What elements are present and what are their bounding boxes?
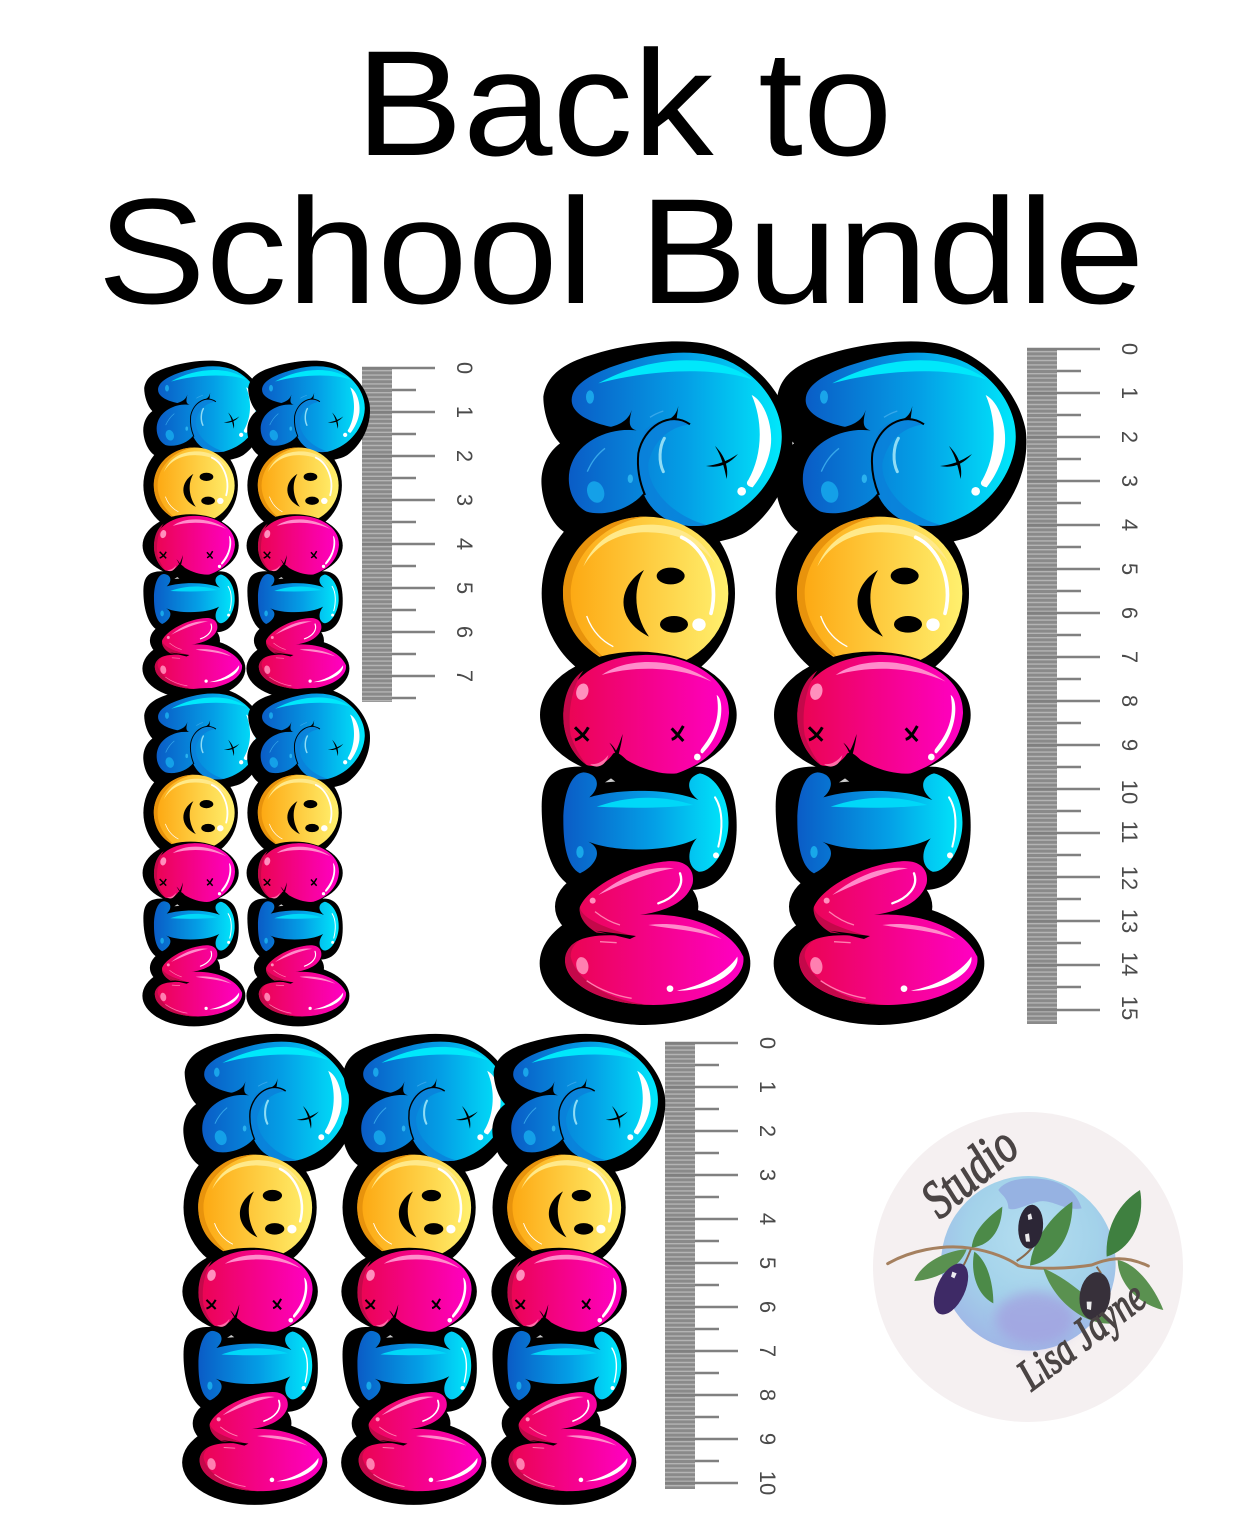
ruler: medium stickers, 0 to 10: 8 <box>755 1389 780 1401</box>
ruler: large stickers, 0 to 15: 14 <box>1117 952 1142 976</box>
logo olive branch <box>888 1190 1163 1324</box>
sticker: large right <box>774 341 1026 1025</box>
ruler: small stickers, 0 to 7: 7 <box>452 670 477 682</box>
ruler: small stickers, 0 to 7: 1 <box>452 406 477 418</box>
ruler: medium stickers, 0 to 10: 5 <box>755 1257 780 1269</box>
ruler: large stickers, 0 to 15: 7 <box>1117 651 1142 663</box>
ruler: medium stickers, 0 to 10: 1 <box>755 1081 780 1093</box>
ruler: small stickers, 0 to 7: 5 <box>452 582 477 594</box>
title: School Bundle <box>98 167 1144 335</box>
ruler: medium stickers, 0 to 10: 3 <box>755 1169 780 1181</box>
ruler: large stickers, 0 to 15: 15 <box>1117 996 1142 1020</box>
ruler: large stickers, 0 to 15: 9 <box>1117 739 1142 751</box>
title: Back to <box>356 19 892 187</box>
sticker: large left <box>540 341 792 1025</box>
ruler: medium stickers, 0 to 10 <box>665 1037 780 1495</box>
ruler: large stickers, 0 to 15 <box>1027 343 1142 1024</box>
sticker: medium right <box>491 1034 665 1505</box>
ruler: medium stickers, 0 to 10: 7 <box>755 1345 780 1357</box>
ruler: medium stickers, 0 to 10: 4 <box>755 1213 780 1225</box>
ruler: large stickers, 0 to 15: 0 <box>1117 343 1142 355</box>
ruler: large stickers, 0 to 15: 6 <box>1117 607 1142 619</box>
ruler: large stickers, 0 to 15: 3 <box>1117 475 1142 487</box>
ruler: small stickers, 0 to 7: 0 <box>452 362 477 374</box>
logo text: Studio: Studio <box>910 1116 1030 1230</box>
ruler: small stickers, 0 to 7 <box>362 362 477 702</box>
ruler: large stickers, 0 to 15: 8 <box>1117 695 1142 707</box>
ruler: large stickers, 0 to 15: 11 <box>1117 821 1142 843</box>
ruler: large stickers, 0 to 15: 5 <box>1117 563 1142 575</box>
ruler: large stickers, 0 to 15: 2 <box>1117 431 1142 443</box>
ruler: small stickers, 0 to 7: 6 <box>452 626 477 638</box>
ruler: large stickers, 0 to 15: 4 <box>1117 519 1142 531</box>
ruler: small stickers, 0 to 7: 3 <box>452 494 477 506</box>
ruler: large stickers, 0 to 15: 10 <box>1117 780 1142 804</box>
sticker: small, row 1 right <box>246 361 370 699</box>
title <box>98 19 1144 335</box>
sticker: medium centre <box>341 1034 515 1505</box>
ruler: large stickers, 0 to 15: 13 <box>1117 909 1142 933</box>
ruler: medium stickers, 0 to 10: 9 <box>755 1433 780 1445</box>
sticker: small, row 1 left <box>142 361 266 699</box>
ruler: large stickers, 0 to 15: 12 <box>1117 866 1142 890</box>
ruler: medium stickers, 0 to 10: 6 <box>755 1301 780 1313</box>
ruler: small stickers, 0 to 7: 4 <box>452 538 477 550</box>
sticker: medium left <box>182 1034 356 1505</box>
ruler: large stickers, 0 to 15: 1 <box>1117 387 1142 399</box>
ruler: small stickers, 0 to 7: 2 <box>452 450 477 462</box>
ruler: medium stickers, 0 to 10: 2 <box>755 1125 780 1137</box>
sticker: small, row 2 right <box>246 688 370 1026</box>
logo text: Lisa Jayne: Lisa Jayne <box>1007 1272 1155 1400</box>
logo watercolour disc <box>941 1176 1116 1351</box>
logo: Studio Lisa Jayne <box>873 1112 1183 1422</box>
sticker: small, row 2 left <box>142 688 266 1026</box>
ruler: medium stickers, 0 to 10: 10 <box>755 1471 780 1495</box>
ruler: medium stickers, 0 to 10: 0 <box>755 1037 780 1049</box>
logo olives <box>927 1204 1114 1322</box>
